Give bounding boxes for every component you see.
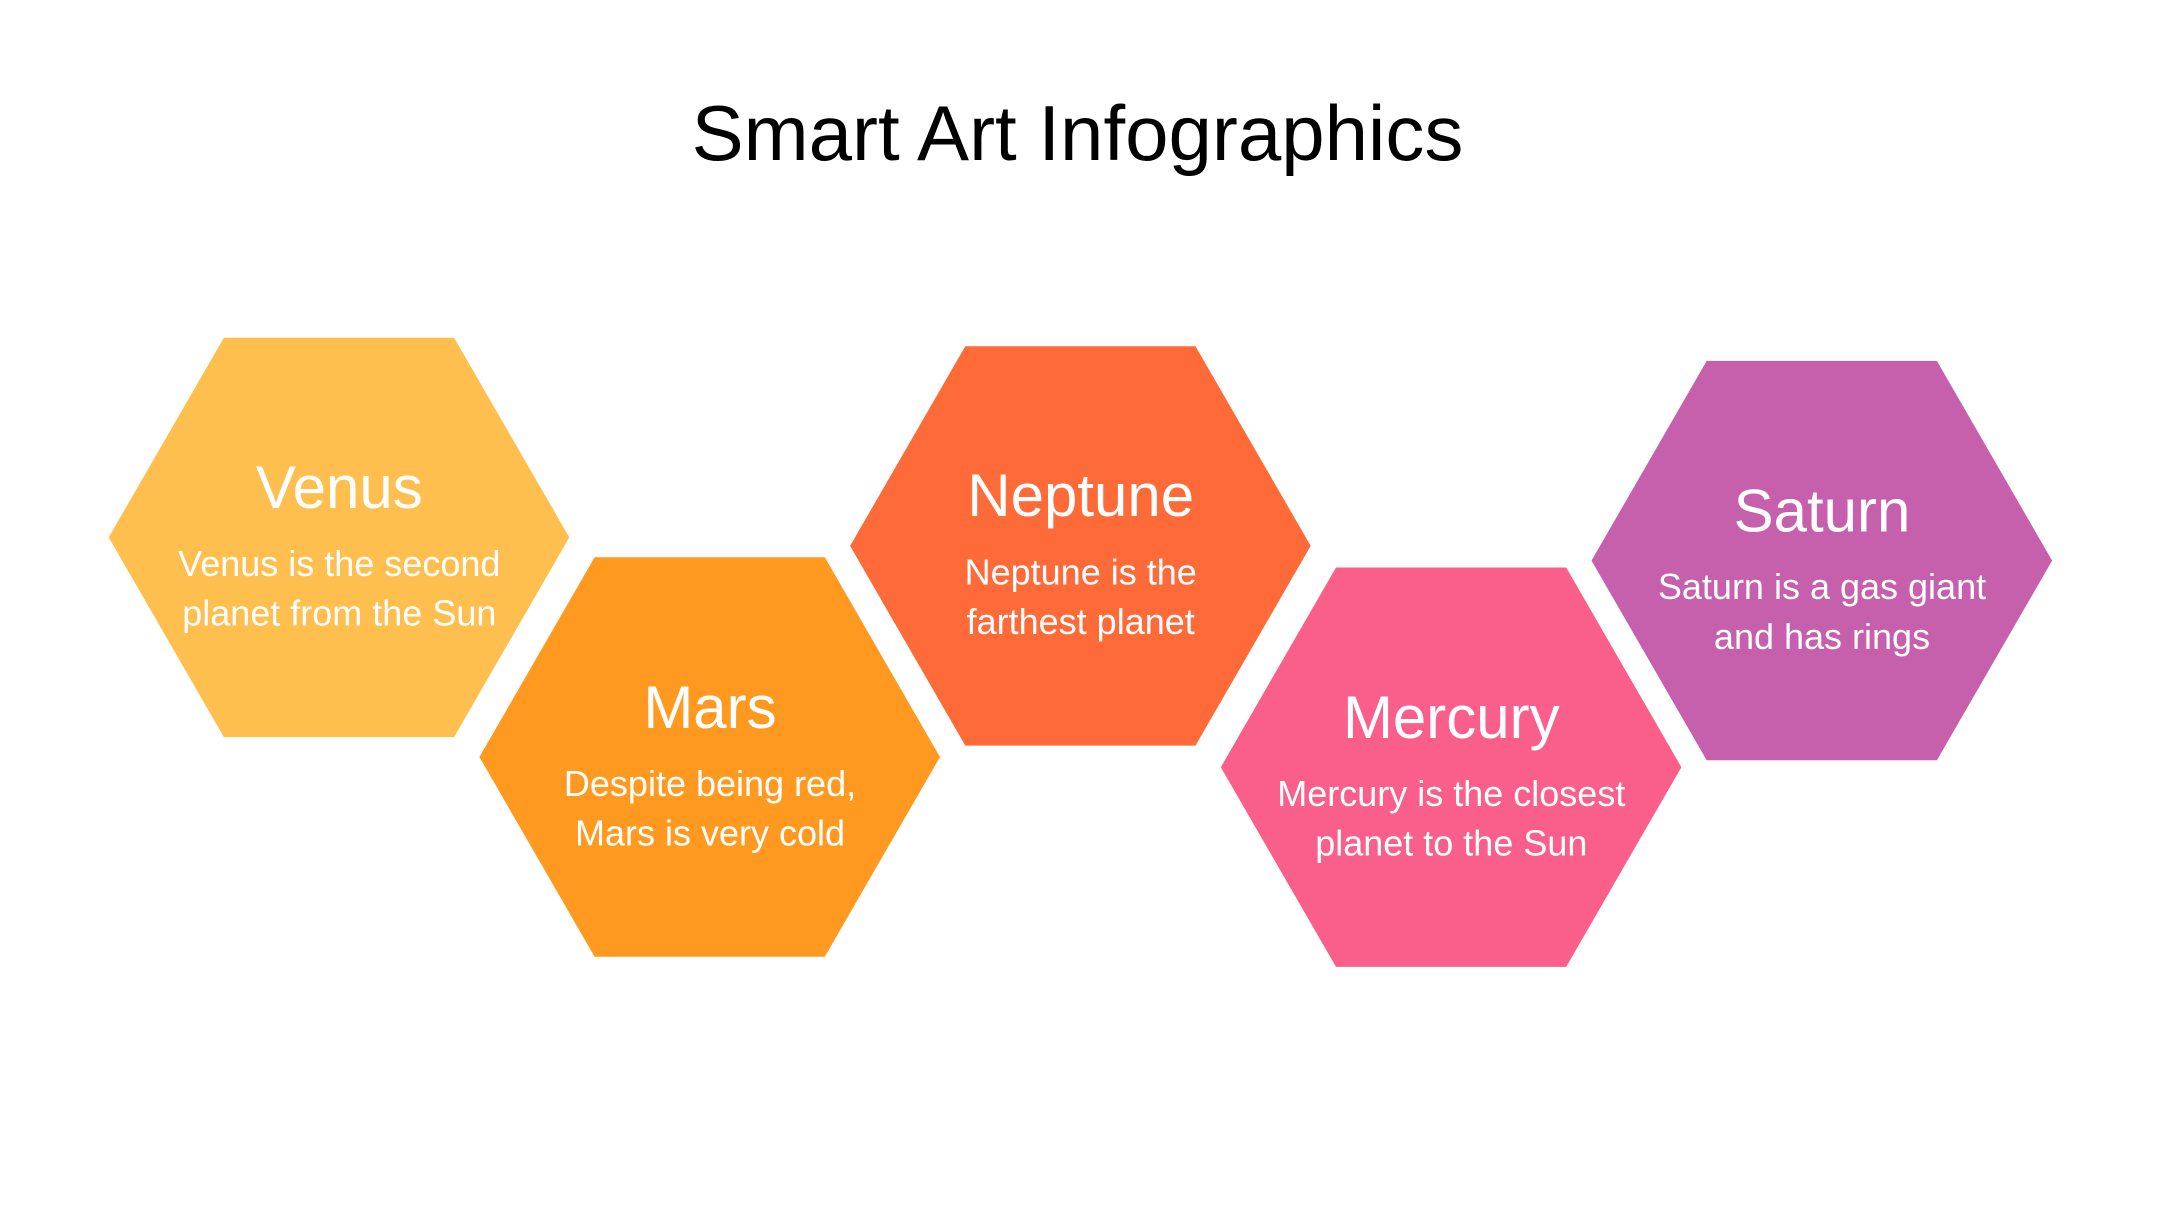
text: Saturn description: Saturn is a gas giant bbox=[1658, 566, 1986, 607]
heading: Venus: Venus bbox=[256, 454, 423, 521]
panel: Saturn bbox=[1592, 361, 2052, 760]
text: Mars description: Mars is very cold bbox=[575, 812, 845, 853]
panel: Mars bbox=[479, 557, 940, 957]
text: Venus description: planet from the Sun bbox=[182, 592, 496, 633]
heading: Saturn: Saturn bbox=[1734, 478, 1910, 544]
text: Mars description: Despite being red, bbox=[564, 763, 856, 804]
panel: Neptune bbox=[850, 346, 1311, 746]
text: Venus description: Venus is the second bbox=[178, 543, 500, 584]
panel: Mercury bbox=[1221, 568, 1681, 967]
title: Smart Art Infographics bbox=[692, 89, 1463, 177]
heading: Mars: Mars bbox=[643, 674, 777, 741]
hexagon: Venus bbox=[109, 338, 569, 737]
heading: Mercury: Mercury bbox=[1343, 684, 1560, 751]
panel: Venus bbox=[109, 338, 569, 737]
text: Saturn description: and has rings bbox=[1714, 616, 1930, 657]
text: Mercury description: Mercury is the closest bbox=[1277, 773, 1625, 814]
hexagon: Mars bbox=[479, 557, 940, 957]
hexagon: Neptune bbox=[850, 346, 1311, 746]
hexagon: Saturn bbox=[1592, 361, 2052, 760]
text: Mercury description: planet to the Sun bbox=[1315, 822, 1587, 863]
text: Neptune description: farthest planet bbox=[967, 601, 1195, 642]
hexagon: Mercury bbox=[1221, 568, 1681, 967]
text: Neptune description: Neptune is the bbox=[965, 551, 1197, 592]
heading: Neptune: Neptune bbox=[967, 462, 1194, 529]
